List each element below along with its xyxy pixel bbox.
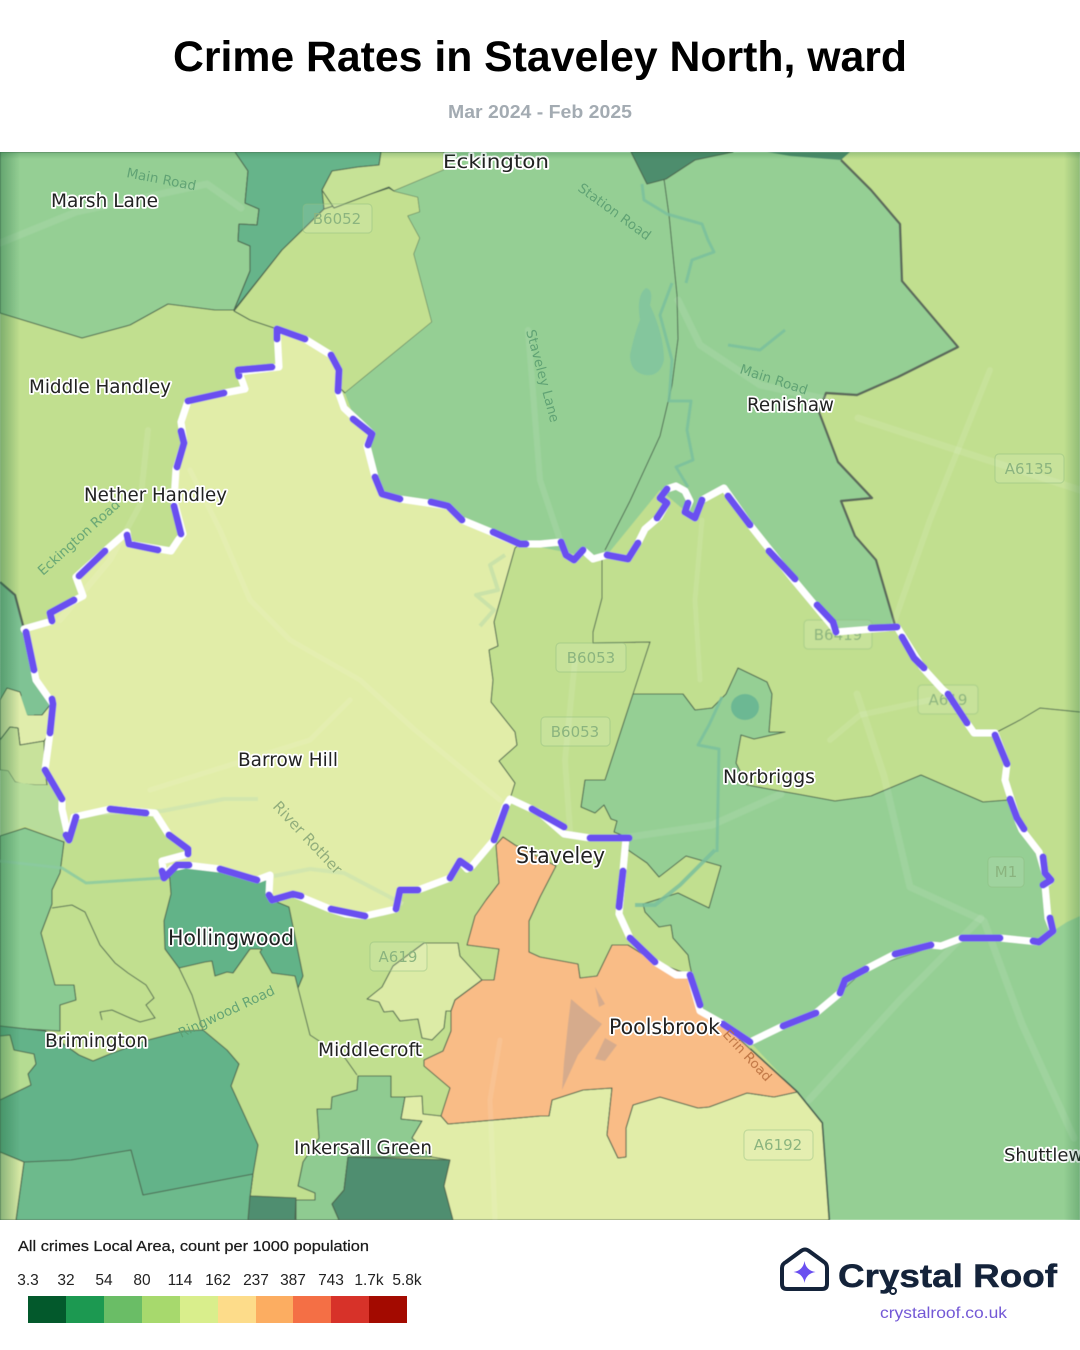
- orange area: dark lake slim: [595, 987, 605, 1007]
- lake: Norbriggs: [731, 694, 759, 720]
- place label: Barrow Hill: Barrow Hill: [238, 749, 338, 771]
- boundary: curved line by railway: [605, 179, 678, 550]
- ward boundary: purple dashes: [26, 329, 1053, 1042]
- boundary: middle lime block: [298, 988, 357, 1075]
- area: dark green top patches: [631, 152, 733, 184]
- road label: Staveley Lane: Staveley Lane: [522, 328, 562, 424]
- wordmark: Crystal Roof: [838, 1258, 1057, 1294]
- area: south Brimington mid-dark green: [0, 1026, 259, 1195]
- area: south dark patch: [248, 1196, 296, 1220]
- boundary: west thick line: [0, 582, 24, 629]
- place label: Norbriggs: Norbriggs: [723, 766, 815, 788]
- map edge shading: top: [0, 152, 1080, 159]
- legend scale values: 743: [318, 1272, 344, 1289]
- road badge: A6135: [995, 454, 1064, 483]
- place label: Staveley: Staveley: [516, 844, 605, 869]
- area: west pale patch: [0, 688, 50, 745]
- road badge: B6053 south: [541, 717, 610, 746]
- area: west ribbon pond: [20, 695, 34, 716]
- subtitle: date range: Mar 2024 - Feb 2025: [448, 101, 632, 122]
- road label: Erin Road: Erin Road: [719, 1027, 775, 1085]
- area: Hollingwood green: [164, 865, 303, 988]
- boundary: Brimington block: [52, 905, 155, 1022]
- area: Eckington top lime: [322, 152, 444, 208]
- legend scale values: 1.7k: [354, 1272, 384, 1289]
- road badge: B6052: [303, 204, 372, 233]
- lake: Renishaw: [630, 288, 664, 375]
- road badge: B6419: B6419: [814, 626, 862, 644]
- legend title: All crimes Local Area, count per 1000 population: [18, 1238, 369, 1255]
- map edge shading: right: [1064, 152, 1080, 1220]
- area: Inkersall Green dark patch: [332, 1157, 453, 1220]
- area: Middlecroft pale patch: [367, 943, 482, 1040]
- road labels: [35, 165, 810, 1085]
- place label: Inkersall Green: Inkersall Green: [294, 1137, 432, 1159]
- road badge: A6192: [744, 1130, 813, 1160]
- orange area: dark lake small: [595, 1038, 617, 1061]
- area: east boundary line north of ward: [995, 708, 1080, 733]
- legend scale values: 5.8k: [392, 1272, 422, 1289]
- road badge: A619 east: [918, 685, 978, 714]
- orange area: dark lake: [562, 999, 602, 1090]
- road badge: A619 south: [370, 942, 427, 971]
- area: west edge green: [0, 584, 50, 715]
- area: west lower lime: [0, 770, 66, 842]
- legend scale values: 387: [280, 1272, 306, 1289]
- road label: Eckington Road: Eckington Road: [35, 497, 124, 579]
- road label: Main Road north-west: Main Road: [125, 165, 197, 194]
- area: Inkersall medium green: [296, 1076, 432, 1220]
- area: dark green top patch east: [767, 152, 850, 160]
- rivers and lakes: [0, 184, 785, 905]
- place label: Brimington: Brimington: [45, 1030, 148, 1052]
- road badge: A619 east: A619: [929, 691, 967, 709]
- region boundary: north-east thick line: [819, 160, 958, 625]
- boundary: Hollingwood to Brimington lines: [179, 968, 203, 1030]
- area: Brimington west green: [0, 828, 76, 1031]
- road badge: M1: M1: [995, 863, 1017, 881]
- area: south-west lime patch: [0, 1035, 36, 1100]
- legend colour bar: [28, 1296, 407, 1323]
- logo: Crystal Roof: [782, 1250, 1057, 1322]
- area: bottom-left corner pale: [0, 1152, 24, 1220]
- road label: River Rother: River Rother: [269, 797, 346, 879]
- website link text: crystalroof.co.uk: [880, 1305, 1008, 1322]
- place label: Eckington: Eckington: [443, 151, 549, 173]
- panel: choropleth map: [0, 151, 1080, 1220]
- area: ward pale yellow lowest-crime zone: [24, 329, 520, 916]
- area: south-west lighter green: [16, 1150, 253, 1220]
- legend: [17, 1238, 422, 1323]
- road label: Ringwood Road: Ringwood Road: [176, 983, 277, 1042]
- icon: house with crystal: [782, 1250, 827, 1289]
- wordmark y loop: [890, 1288, 896, 1294]
- road badge: B6419: [804, 620, 872, 649]
- legend scale values: 114: [168, 1272, 193, 1289]
- legend scale values: 237: [243, 1272, 269, 1289]
- place label: Poolsbrook: Poolsbrook: [609, 1015, 721, 1039]
- place label: Hollingwood: Hollingwood: [168, 926, 294, 950]
- title: Crime Rates in Staveley North, ward: [173, 33, 907, 81]
- roads: faint lighter strokes: [0, 184, 1080, 1220]
- road label: Station Road: Station Road: [575, 180, 654, 244]
- road badge: B6053 north: [556, 643, 626, 672]
- road badge: A619 south: A619: [379, 948, 417, 966]
- road badge: M1: [988, 857, 1024, 887]
- legend scale values: 32: [57, 1272, 75, 1289]
- boundary: south-east thick line: [750, 1049, 829, 1220]
- place label: Nether Handley: Nether Handley: [84, 484, 227, 506]
- legend scale values: [17, 1272, 422, 1289]
- area: south-centre pale yellow: [401, 1088, 829, 1220]
- map edge shading: left: [0, 152, 20, 1220]
- road badge: B6052: B6052: [313, 210, 361, 228]
- ward boundary: white casing: [24, 329, 1053, 1042]
- area: west lime patch: [0, 727, 47, 785]
- legend scale values: 162: [205, 1272, 231, 1289]
- area: south-east green: [750, 916, 1080, 1220]
- road badge: B6053 south: B6053: [551, 723, 599, 741]
- place label: Marsh Lane: Marsh Lane: [51, 190, 158, 212]
- place label: Middle Handley: Middle Handley: [29, 376, 171, 398]
- area: Eckington south lime: [234, 188, 432, 393]
- road badge: A6135: A6135: [1005, 460, 1053, 478]
- road badge: B6053 north: B6053: [567, 649, 615, 667]
- boundary: Staveley Lane block: [593, 560, 650, 694]
- road label: Main Road Renishaw: Main Road: [738, 362, 810, 399]
- legend scale values: 3.3: [17, 1272, 39, 1289]
- area: north dark green wedge: [234, 152, 381, 310]
- legend scale values: 80: [133, 1272, 151, 1289]
- area: Poolsbrook orange high-crime: [424, 837, 797, 1158]
- legend scale values: 54: [95, 1272, 113, 1289]
- area: central and north-east green: [345, 152, 958, 632]
- road badge: A6192: A6192: [754, 1136, 802, 1154]
- area: Marsh Lane green: [0, 152, 259, 338]
- area: Norbriggs green: [581, 668, 1053, 1042]
- place label: Middlecroft: Middlecroft: [318, 1039, 422, 1061]
- place label: Renishaw: Renishaw: [747, 394, 834, 416]
